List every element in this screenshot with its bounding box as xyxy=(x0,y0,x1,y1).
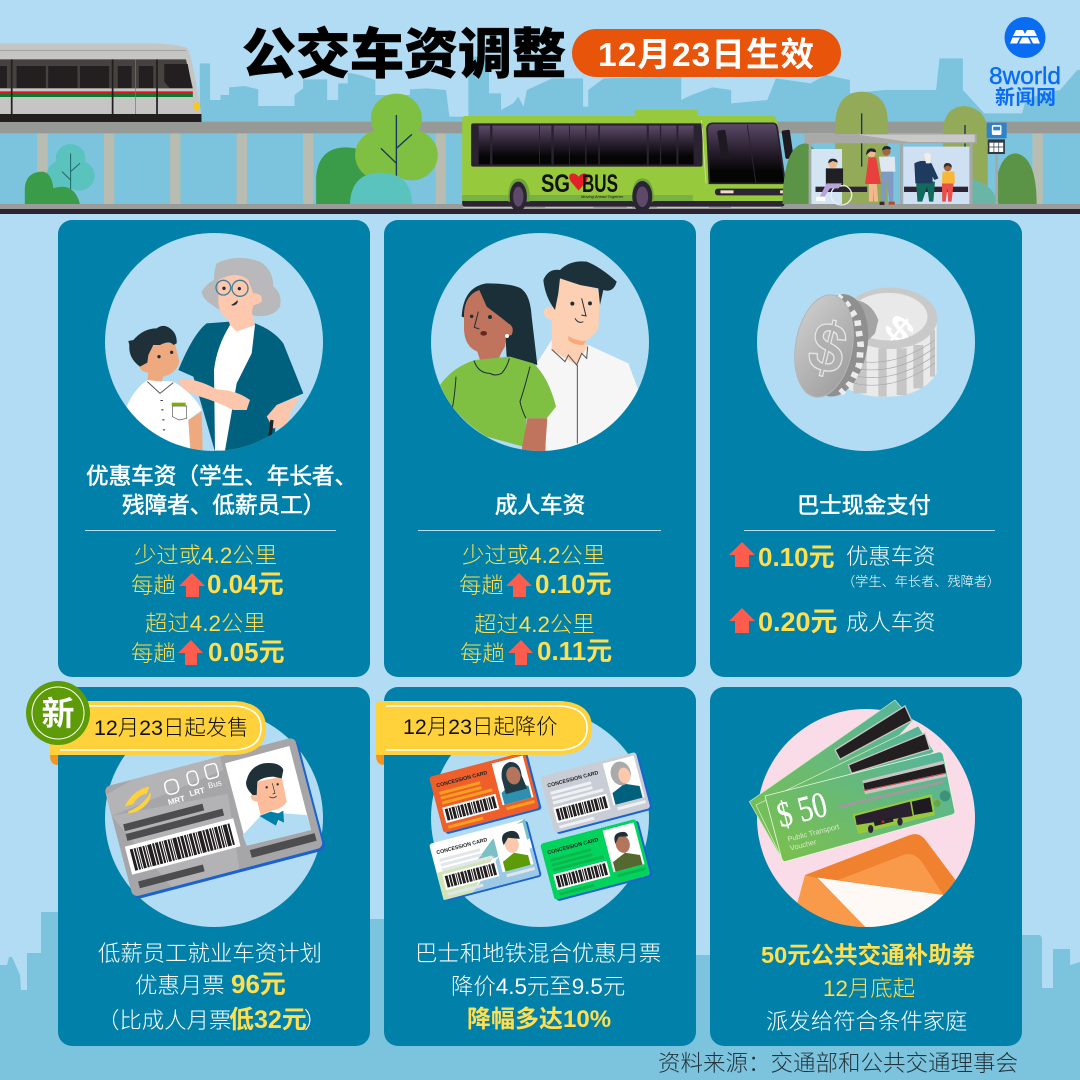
adult cash fare: 成人车资 xyxy=(846,610,936,635)
fare under 4.2km: 每趟 xyxy=(131,573,176,598)
bus shelter xyxy=(782,92,1037,205)
ribbon: on sale date xyxy=(50,701,266,765)
elevated track xyxy=(0,122,1080,204)
fare under 4.2km: 0.10元 xyxy=(535,569,612,599)
illustration: vouchers xyxy=(749,700,955,862)
bus logo text: BUS xyxy=(582,170,618,198)
large tree xyxy=(316,94,438,204)
heading xyxy=(86,464,357,518)
heading: 优惠车资（学生、年长者、 xyxy=(86,464,357,489)
ribbon: price cut date: 12月23日起降价 xyxy=(403,715,558,739)
bottom skyline xyxy=(0,912,1080,1080)
illustration: grandmother and boy xyxy=(127,258,303,452)
bus logo text: SG xyxy=(541,170,570,198)
caption: （比成人月票 xyxy=(97,1008,231,1033)
fare under 4.2km: 0.04元 xyxy=(207,569,284,599)
caption: 12月底起 xyxy=(823,976,915,1001)
fare over 4.2km xyxy=(131,611,285,667)
card: orange: CONCESSION CARD xyxy=(436,770,488,789)
illustration: adults xyxy=(440,261,638,452)
caption xyxy=(415,941,661,1033)
logo: 8world xyxy=(989,17,1061,109)
ribbon: price cut date xyxy=(376,701,592,765)
caption: ） xyxy=(304,1008,326,1033)
panel: hybrid concession pass xyxy=(376,687,696,1046)
elderly man and girl xyxy=(914,153,955,202)
concession cash fare: 0.10元 xyxy=(758,542,835,572)
card: grey: CONCESSION CARD xyxy=(547,770,599,789)
concession cash fare xyxy=(729,542,1000,589)
fare under 4.2km: 少过或4.2公里 xyxy=(462,543,605,568)
bus xyxy=(462,110,794,212)
caption: 96元 xyxy=(231,969,286,999)
fare over 4.2km: 0.11元 xyxy=(537,636,612,666)
panel: transport voucher xyxy=(710,687,1022,1046)
fare over 4.2km: 每趟 xyxy=(460,641,505,666)
header scene xyxy=(0,43,1080,214)
fare under 4.2km: 每趟 xyxy=(459,573,504,598)
illustration: concession card: MRT xyxy=(167,794,186,807)
illustration: concession card: LRT xyxy=(188,786,206,798)
source: 资料来源：交通部和公共交通理事会 xyxy=(658,1051,1018,1076)
card: white student: CONCESSION CARD xyxy=(436,837,488,856)
icon: bus stop sign xyxy=(987,123,1007,204)
caption xyxy=(761,941,976,1034)
caption: 低32元 xyxy=(229,1006,307,1034)
illustration: vouchers: $ 50 xyxy=(773,784,831,835)
small tree xyxy=(25,144,95,204)
bus logo text xyxy=(541,170,624,199)
caption: 降幅多达10% xyxy=(467,1006,611,1033)
fare under 4.2km: 少过或4.2公里 xyxy=(134,543,277,568)
fare under 4.2km xyxy=(459,543,612,599)
card: green NS: CONCESSION CARD xyxy=(547,837,599,856)
panel: adult fares xyxy=(384,220,696,677)
illustration: envelope xyxy=(790,834,957,930)
illustration: vouchers: Public Transport xyxy=(787,822,840,844)
panel: concession fares xyxy=(58,220,370,677)
fare over 4.2km xyxy=(460,612,612,666)
illustration: concession card: Bus xyxy=(207,778,223,790)
logo: 8world: 新闻网 xyxy=(995,86,1056,109)
card: green NS xyxy=(540,818,653,902)
illustration: silver coins xyxy=(787,288,937,402)
fare over 4.2km: 0.05元 xyxy=(208,637,285,667)
woman and man standing xyxy=(865,146,895,205)
card: white student xyxy=(429,818,542,902)
badge: new xyxy=(26,681,90,745)
caption: 50元公共交通补助券 xyxy=(761,941,976,968)
fare over 4.2km: 超过4.2公里 xyxy=(145,611,266,636)
caption: 低薪员工就业车资计划 xyxy=(98,941,322,966)
fare under 4.2km xyxy=(131,543,284,599)
caption xyxy=(97,941,326,1034)
adult cash fare xyxy=(729,607,936,637)
illustration: concession card xyxy=(104,737,326,900)
caption: 优惠月票 xyxy=(135,973,225,998)
adult cash fare: 0.20元 xyxy=(758,607,838,637)
title: 公交车资调整 xyxy=(242,25,566,85)
bus logo text: Moving Ahead Together xyxy=(581,194,624,199)
card: grey xyxy=(540,751,653,835)
illustration: silver coins: $ xyxy=(877,307,922,354)
card: orange xyxy=(429,751,542,835)
caption: 派发给符合条件家庭 xyxy=(766,1009,968,1034)
panel: bus cash payment xyxy=(710,220,1022,677)
panel: low-wage worker concession xyxy=(26,681,370,1046)
illustration: vouchers: Voucher xyxy=(789,837,818,853)
heading: 残障者、低薪员工） xyxy=(122,493,325,518)
caption: 巴士和地铁混合优惠月票 xyxy=(415,941,661,966)
train xyxy=(0,43,201,122)
ribbon: on sale date: 12月23日起发售 xyxy=(94,716,249,740)
fare over 4.2km: 每趟 xyxy=(131,641,176,666)
caption: 降价4.5元至9.5元 xyxy=(451,974,625,999)
fare over 4.2km: 超过4.2公里 xyxy=(474,612,595,637)
wheelchair user xyxy=(816,159,852,205)
concession cash fare: （学生、年长者、残障者） xyxy=(842,574,1000,589)
road xyxy=(0,204,1080,214)
heading: 巴士现金支付 xyxy=(797,493,931,518)
illustration: silver coins: $ xyxy=(801,306,854,390)
concession cash fare: 优惠车资 xyxy=(846,544,936,569)
date pill xyxy=(572,29,841,77)
badge: new: 新 xyxy=(42,695,74,732)
skyline xyxy=(0,57,1080,207)
heading: 成人车资 xyxy=(495,493,585,518)
date pill: 12月23日生效 xyxy=(598,37,814,74)
logo: 8world: 8world xyxy=(989,63,1061,90)
